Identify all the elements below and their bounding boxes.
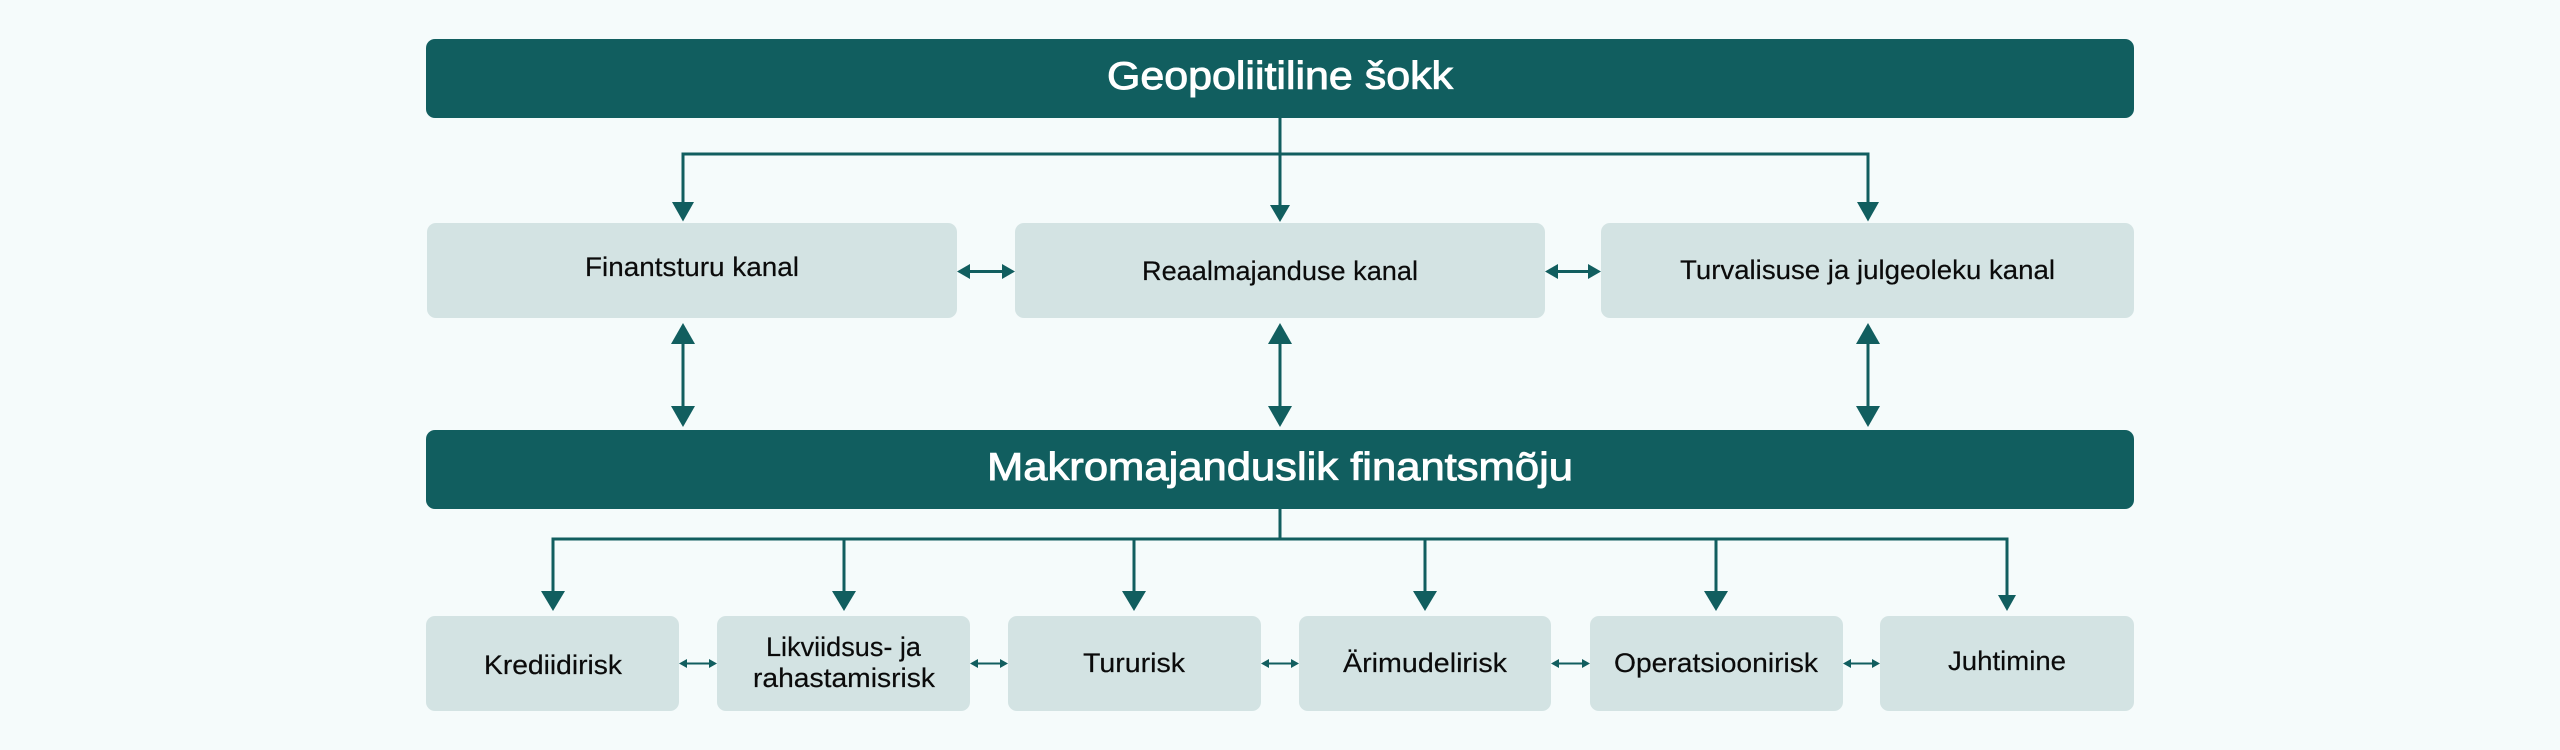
panel: operational risk — [1590, 616, 1843, 711]
panel: real economy channel: Reaalmajanduse kanal — [1142, 256, 1418, 286]
panel: market risk — [1008, 616, 1261, 711]
panel: real economy channel — [1015, 223, 1545, 318]
panel: security channel — [1601, 223, 2134, 318]
arrows: between risks — [679, 659, 1880, 668]
panel: business model risk — [1299, 616, 1551, 711]
arrows: between channels — [957, 264, 1601, 279]
panel: market risk: Tururisk — [1083, 648, 1186, 678]
panel: financial market channel — [427, 223, 957, 318]
arrows: channels to macro impact — [671, 323, 1880, 427]
heading bar: Makromajanduslik finantsmõju: Makromajanduslik finantsmõju — [987, 446, 1573, 489]
panel: liquidity and funding risk — [717, 616, 970, 711]
panel: business model risk: Ärimudelirisk — [1343, 648, 1508, 678]
panel: governance: Juhtimine — [1948, 646, 2066, 676]
heading bar: Geopoliitiline šokk: Geopoliitiline šokk — [1107, 55, 1454, 98]
panel: operational risk: Operatsioonirisk — [1614, 648, 1819, 678]
panel: liquidity and funding risk: rahastamisrisk — [753, 663, 936, 693]
panel: security channel: Turvalisuse ja julgeoleku kanal — [1680, 255, 2055, 285]
panel: credit risk: Krediidirisk — [484, 650, 623, 680]
panel: governance — [1880, 616, 2134, 711]
heading bar: Makromajanduslik finantsmõju — [426, 430, 2134, 509]
arrows: macro impact to six risks — [541, 509, 2016, 611]
panel: financial market channel: Finantsturu kanal — [585, 252, 799, 282]
panel: liquidity and funding risk: Likviidsus- ja — [766, 632, 921, 662]
arrows: shock to three channels — [672, 118, 1879, 222]
panel: credit risk — [426, 616, 679, 711]
heading bar: Geopoliitiline šokk — [426, 39, 2134, 118]
